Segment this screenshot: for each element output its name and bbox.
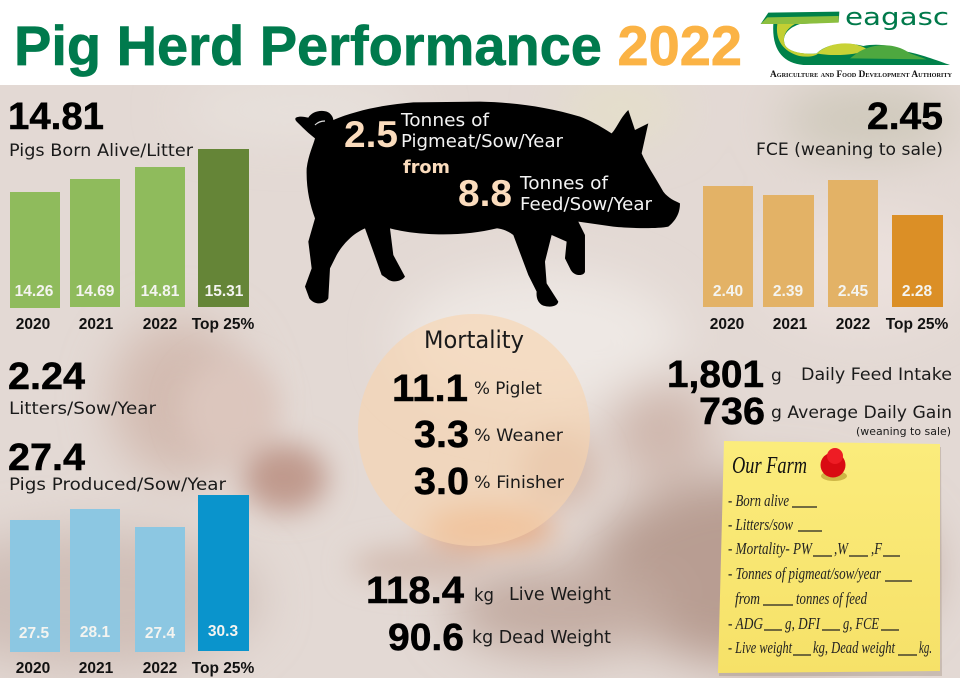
stats: live and dead weight: kg (474, 585, 494, 606)
stats: feed intake and daily gain (667, 354, 952, 438)
icon: red pin (820, 448, 847, 481)
note lines: kg, Dead weight (813, 638, 896, 657)
bar chart: pigs born alive: 15.31 (205, 283, 244, 300)
stats: feed intake and daily gain: 736 (699, 391, 765, 433)
header band (0, 0, 960, 85)
note lines (728, 491, 932, 657)
panel: mortality circle (358, 314, 590, 546)
stat: pigs produced: 27.4 (8, 437, 85, 479)
bar chart: pigs produced: 28.1 (80, 624, 110, 641)
bar chart: pigs born alive: 2020 (16, 316, 50, 333)
panel: mortality circle: 3.0 (414, 461, 469, 503)
stats: live and dead weight: kg Dead Weight (472, 627, 611, 648)
bar chart: FCE: Top 25% (886, 316, 949, 333)
pig silhouette with tonnes text: 8.8 (458, 173, 512, 214)
note heading: Our Farm (732, 453, 807, 479)
panel: mortality circle: % Weaner (474, 426, 563, 446)
bar chart: pigs born alive: 14.69 (76, 283, 115, 300)
note lines: from (735, 589, 760, 608)
stat: pigs produced (8, 437, 226, 495)
note lines: - Litters/sow (728, 515, 793, 534)
pig silhouette with tonnes text: from (403, 157, 450, 178)
bar chart: FCE: 2.40 (713, 283, 743, 300)
logo: Teagasc: eagasc (845, 3, 949, 31)
stats: feed intake and daily gain: Daily Feed Intake (801, 365, 952, 385)
stat: litters per sow (8, 356, 156, 419)
bar chart: pigs born alive: 2022 (143, 316, 177, 333)
pig silhouette with tonnes text: Feed/Sow/Year (520, 194, 653, 215)
logo: Teagasc (761, 3, 953, 79)
title: Pig Herd Performance 2022 (14, 14, 742, 77)
pig silhouette with tonnes text: 2.5 (344, 114, 398, 155)
bar chart: FCE: 2020 (710, 316, 744, 333)
bar chart: pigs born alive (10, 149, 255, 333)
bar chart: FCE: 2.39 (773, 283, 803, 300)
bar chart: pigs born alive: 14.26 (15, 283, 54, 300)
stat: FCE: 2.45 (867, 96, 943, 138)
note lines: ,F (871, 539, 882, 558)
panel: mortality circle: % Finisher (474, 473, 564, 493)
stat: pigs born alive: Pigs Born Alive/Litter (9, 141, 193, 161)
note lines: g, FCE (843, 614, 879, 633)
note lines: ,W (834, 539, 849, 558)
panel: mortality circle: 11.1 (392, 368, 468, 410)
note lines: - Live weight (728, 638, 793, 657)
stats: feed intake and daily gain: 1,801 (667, 354, 764, 396)
bar chart: pigs produced: 2022 (143, 660, 177, 677)
panel: mortality circle: 3.3 (414, 414, 469, 456)
bar chart: FCE: 2.45 (838, 283, 868, 300)
stats: feed intake and daily gain: g (771, 366, 782, 386)
stats: live and dead weight: 118.4 (366, 570, 464, 612)
stat: pigs born alive (8, 96, 193, 161)
logo: Teagasc: Agriculture and Food Development Authority (770, 69, 953, 79)
panel: mortality circle: % Piglet (474, 379, 542, 399)
stats: live and dead weight (366, 570, 611, 659)
bar chart: pigs produced: 27.5 (19, 625, 49, 642)
bar chart: pigs produced: 2021 (79, 660, 114, 677)
bar chart: pigs born alive: 2021 (79, 316, 114, 333)
note lines: - Born alive (728, 491, 789, 510)
bar chart: FCE: 2.28 (902, 283, 932, 300)
panel: mortality circle: Mortality (424, 326, 524, 354)
stats: feed intake and daily gain: g Average Daily Gain (771, 403, 952, 423)
note lines: tonnes of feed (796, 589, 867, 608)
bar chart: pigs produced (10, 495, 255, 677)
stat: FCE: FCE (weaning to sale) (756, 140, 943, 160)
bar chart: pigs born alive: Top 25% (192, 316, 255, 333)
stat: litters per sow: 2.24 (8, 356, 85, 398)
pig silhouette with tonnes text: Tonnes of (400, 110, 490, 131)
stat: pigs produced: Pigs Produced/Sow/Year (9, 475, 226, 495)
stats: live and dead weight: 90.6 (388, 617, 464, 659)
bar chart: pigs produced: 30.3 (208, 623, 238, 640)
bar chart: pigs produced: Top 25% (192, 660, 255, 677)
pig silhouette with tonnes text: Tonnes of (519, 173, 609, 194)
stat: litters per sow: Litters/Sow/Year (9, 399, 156, 419)
pig silhouette with tonnes text (295, 102, 680, 307)
stat: FCE (756, 96, 943, 160)
note lines: - Mortality- PW (728, 539, 813, 558)
bar chart: FCE: 2021 (773, 316, 808, 333)
pig silhouette with tonnes text: Pigmeat/Sow/Year (401, 131, 564, 152)
note lines: g, DFI (785, 614, 821, 633)
bar chart: FCE (703, 180, 949, 333)
note lines: - ADG (728, 614, 763, 633)
stats: live and dead weight: Live Weight (509, 584, 611, 605)
panel: Our Farm sticky note (718, 441, 942, 676)
bar chart: FCE: 2022 (836, 316, 870, 333)
bar chart: pigs born alive: 14.81 (141, 283, 180, 300)
icon: pig (295, 102, 680, 307)
bar chart: pigs produced: 27.4 (145, 625, 175, 642)
note lines: kg. (919, 638, 932, 657)
stats: feed intake and daily gain: (weaning to sale) (856, 425, 951, 438)
note lines: - Tonnes of pigmeat/sow/year (728, 564, 881, 583)
stat: pigs born alive: 14.81 (8, 96, 104, 138)
bar chart: pigs produced: 2020 (16, 660, 50, 677)
